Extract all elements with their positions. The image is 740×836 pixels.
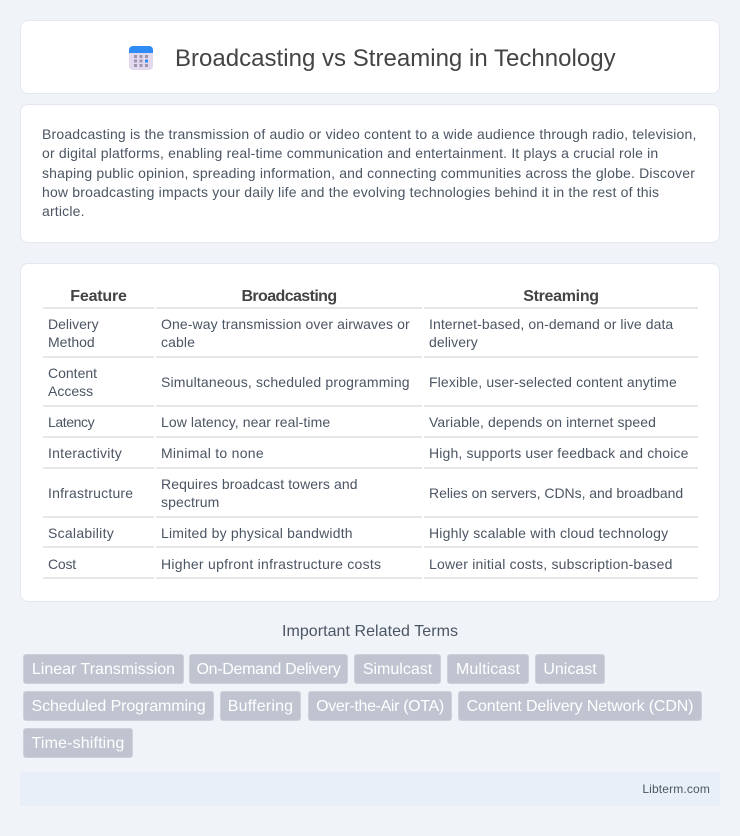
row: Latency bbox=[43, 414, 698, 438]
related term tags: Simulcast bbox=[363, 661, 432, 678]
row: Content Access: Simultaneous, scheduled programming bbox=[161, 374, 410, 390]
related term tags: Content Delivery Network (CDN) bbox=[467, 698, 693, 715]
row: Content Access bbox=[43, 365, 698, 407]
intro text panel: how broadcasting impacts your daily life and the evolving technologies behind it in the rest of this bbox=[42, 184, 659, 200]
related terms heading: Important Related Terms bbox=[282, 623, 458, 640]
related term tags: Linear Transmission bbox=[32, 661, 175, 678]
row: Interactivity: Interactivity bbox=[48, 445, 122, 461]
footer bbox=[20, 772, 720, 806]
table header bbox=[43, 288, 698, 309]
row: Delivery Method bbox=[43, 316, 698, 358]
row: Content Access: Access bbox=[48, 383, 93, 399]
row: Latency: Low latency, near real-time bbox=[161, 414, 330, 430]
table header: Broadcasting bbox=[241, 288, 337, 305]
row: Latency: Latency bbox=[48, 414, 94, 430]
row: Delivery Method: One-way transmission over airwaves or bbox=[161, 316, 410, 332]
table header: Streaming bbox=[523, 288, 599, 305]
row: Infrastructure: spectrum bbox=[161, 494, 219, 510]
row: Delivery Method: Internet-based, on-demand or live data bbox=[429, 316, 673, 332]
intro text panel: shaping public opinion, spreading information, and connecting communities across the globe. Discover bbox=[42, 165, 695, 181]
row: Content Access: Content bbox=[48, 365, 97, 381]
row: Interactivity bbox=[43, 445, 698, 469]
intro text panel: article. bbox=[42, 203, 85, 219]
related term tags: Unicast bbox=[543, 661, 597, 678]
row: Cost: Higher upfront infrastructure costs bbox=[161, 556, 381, 572]
row: Cost: Cost bbox=[48, 556, 76, 572]
table header: Feature bbox=[70, 288, 127, 305]
row: Infrastructure: Infrastructure bbox=[48, 485, 133, 501]
related term tags: Time-shifting bbox=[32, 735, 124, 752]
related term tags: On-Demand Delivery bbox=[196, 661, 340, 678]
row: Delivery Method: cable bbox=[161, 334, 195, 350]
comparison table panel bbox=[20, 263, 720, 602]
related term tags bbox=[23, 654, 702, 758]
icon: calendar bbox=[129, 46, 153, 70]
row: Infrastructure bbox=[43, 476, 698, 518]
row: Interactivity: Minimal to none bbox=[161, 445, 264, 461]
intro text panel: or digital platforms, enabling real-time communication and entertainment. It plays a crucial role in bbox=[42, 145, 658, 161]
related term tags: Multicast bbox=[456, 661, 520, 678]
title: Broadcasting vs Streaming in Technology bbox=[175, 45, 616, 72]
intro text panel: Broadcasting is the transmission of audio or video content to a wide audience through radio, television, bbox=[42, 126, 697, 142]
related term tags: Over-the-Air (OTA) bbox=[316, 698, 444, 715]
row: Scalability: Scalability bbox=[48, 525, 114, 541]
row: Scalability: Limited by physical bandwidth bbox=[161, 525, 353, 541]
row: Cost bbox=[43, 556, 698, 579]
row: Scalability bbox=[43, 525, 698, 548]
row: Infrastructure: Relies on servers, CDNs, and broadband bbox=[429, 485, 683, 501]
row: Content Access: Flexible, user-selected content anytime bbox=[429, 374, 677, 390]
header panel bbox=[20, 20, 720, 94]
row: Delivery Method: Delivery bbox=[48, 316, 99, 332]
row: Latency: Variable, depends on internet speed bbox=[429, 414, 656, 430]
related term tags: Buffering bbox=[228, 698, 293, 715]
row: Interactivity: High, supports user feedback and choice bbox=[429, 445, 689, 461]
row: Delivery Method: delivery bbox=[429, 334, 478, 350]
intro text panel bbox=[20, 104, 720, 243]
row: Delivery Method: Method bbox=[48, 334, 95, 350]
row: Cost: Lower initial costs, subscription-based bbox=[429, 556, 673, 572]
row: Infrastructure: Requires broadcast towers and bbox=[161, 476, 358, 492]
footer credit: Libterm.com bbox=[642, 782, 710, 796]
row: Scalability: Highly scalable with cloud technology bbox=[429, 525, 668, 541]
related term tags: Scheduled Programming bbox=[32, 698, 206, 715]
